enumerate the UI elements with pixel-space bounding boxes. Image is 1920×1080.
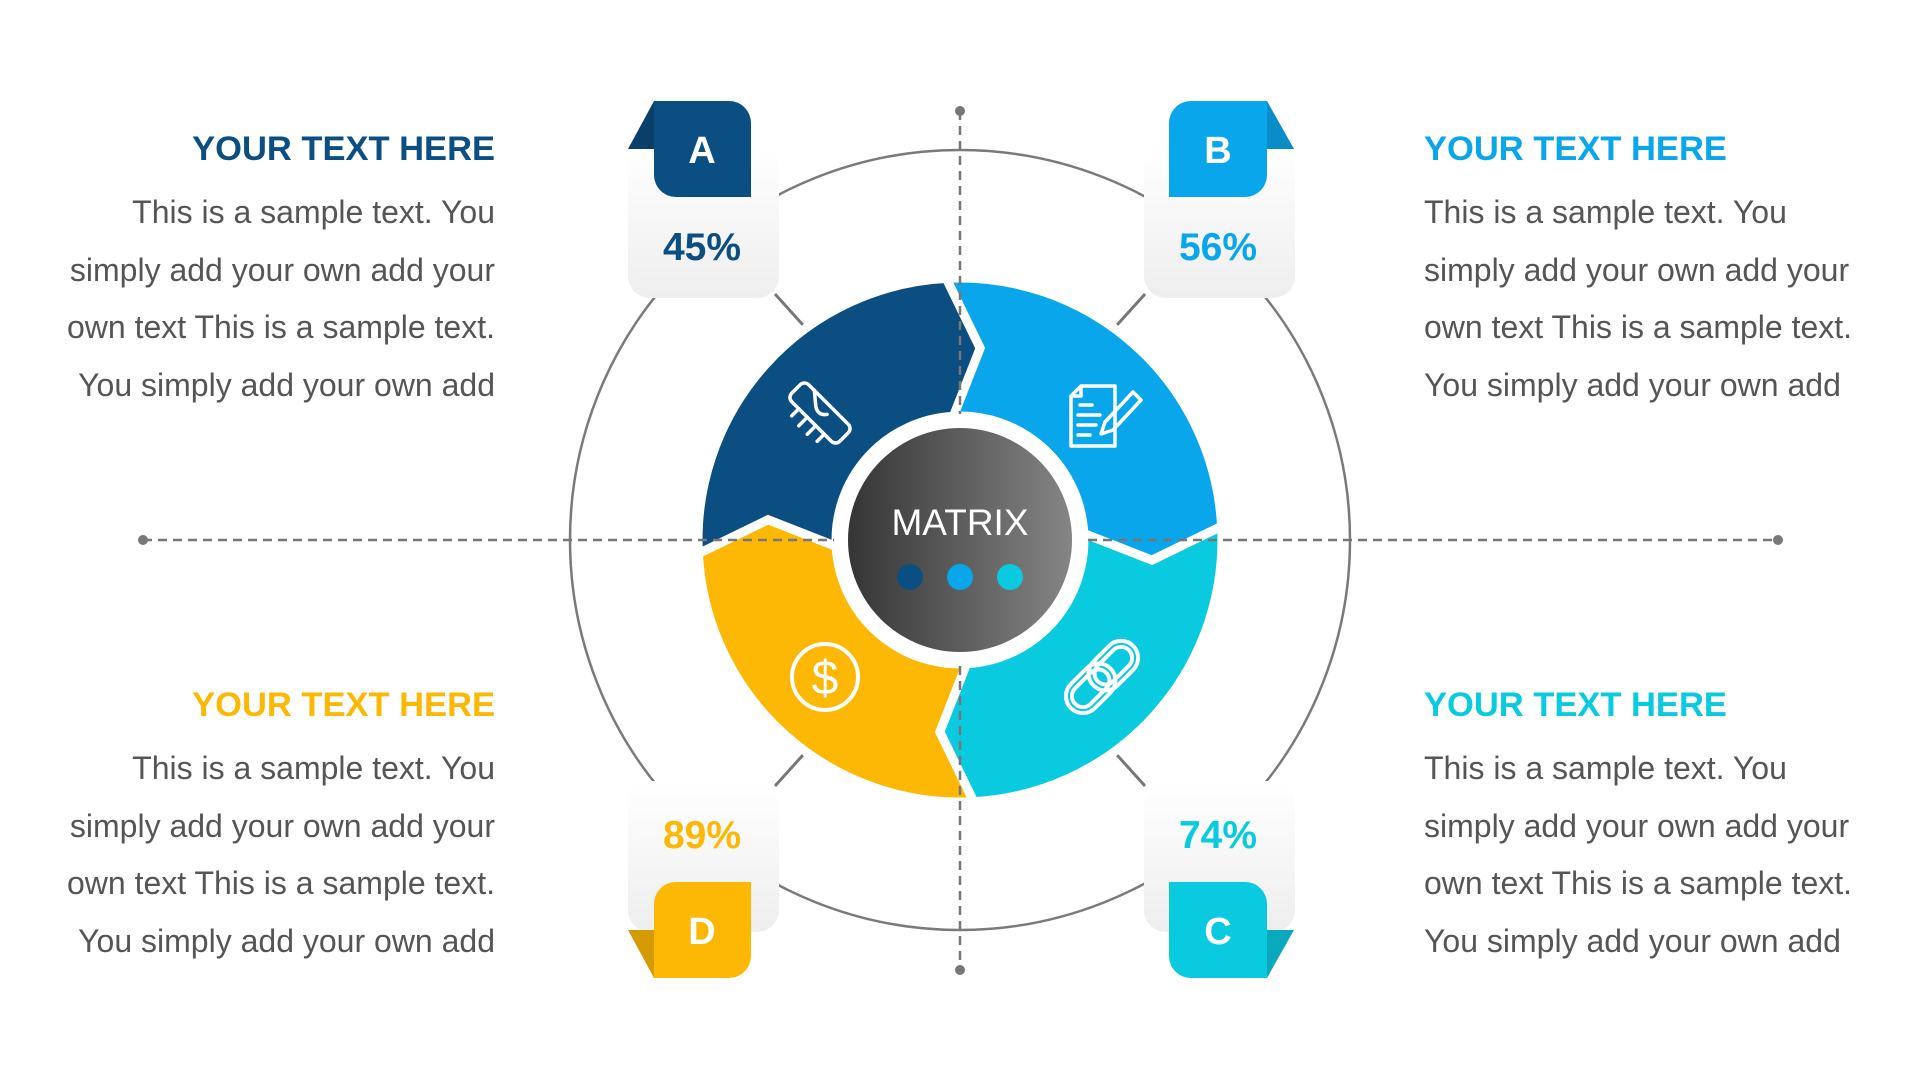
text block B: This is a sample text. You [1424,194,1787,230]
title C: YOUR TEXT HERE [1424,686,1727,724]
text block C: own text This is a sample text. [1424,865,1852,901]
connector lines [775,294,1145,786]
segment A [698,278,980,554]
card C [1144,781,1295,978]
card A [628,101,779,298]
text block A: This is a sample text. You [132,194,495,230]
text block D: simply add your own add your [70,808,495,844]
center circle: MATRIX [891,502,1029,543]
text block B [1424,194,1852,403]
outer circle [570,150,1350,930]
card D [628,781,779,978]
icon: dollar: $ [812,652,838,705]
text block C: You simply add your own add [1424,923,1841,959]
icon: dollar [792,644,858,710]
text block A [67,194,495,403]
center circle [834,414,1086,666]
icon: chain link [1059,634,1145,720]
title A: YOUR TEXT HERE [192,130,495,168]
card D: D [688,911,716,953]
text block D [67,750,495,959]
segment C [940,526,1222,802]
text block B: own text This is a sample text. [1424,309,1852,345]
text block B: simply add your own add your [1424,252,1849,288]
card C: C [1204,911,1232,953]
text block D: You simply add your own add [78,923,495,959]
icon: handshake [779,380,853,454]
card D: 89% [663,814,741,857]
text block A: simply add your own add your [70,252,495,288]
text block C: simply add your own add your [1424,808,1849,844]
text block D: This is a sample text. You [132,750,495,786]
card B [1144,101,1295,298]
text block B: You simply add your own add [1424,367,1841,403]
text block C: This is a sample text. You [1424,750,1787,786]
card A: 45% [663,226,741,269]
title D: YOUR TEXT HERE [192,686,495,724]
segment B [946,278,1222,560]
text block A: own text This is a sample text. [67,309,495,345]
icon: document [1071,386,1141,446]
text block D: own text This is a sample text. [67,865,495,901]
card C: 74% [1179,814,1257,857]
segment D [698,520,974,802]
dashed axes [143,111,1778,970]
card B: 56% [1179,226,1257,269]
card B: B [1204,130,1232,172]
card A: A [688,130,716,172]
text block A: You simply add your own add [78,367,495,403]
title B: YOUR TEXT HERE [1424,130,1727,168]
text block C [1424,750,1852,959]
